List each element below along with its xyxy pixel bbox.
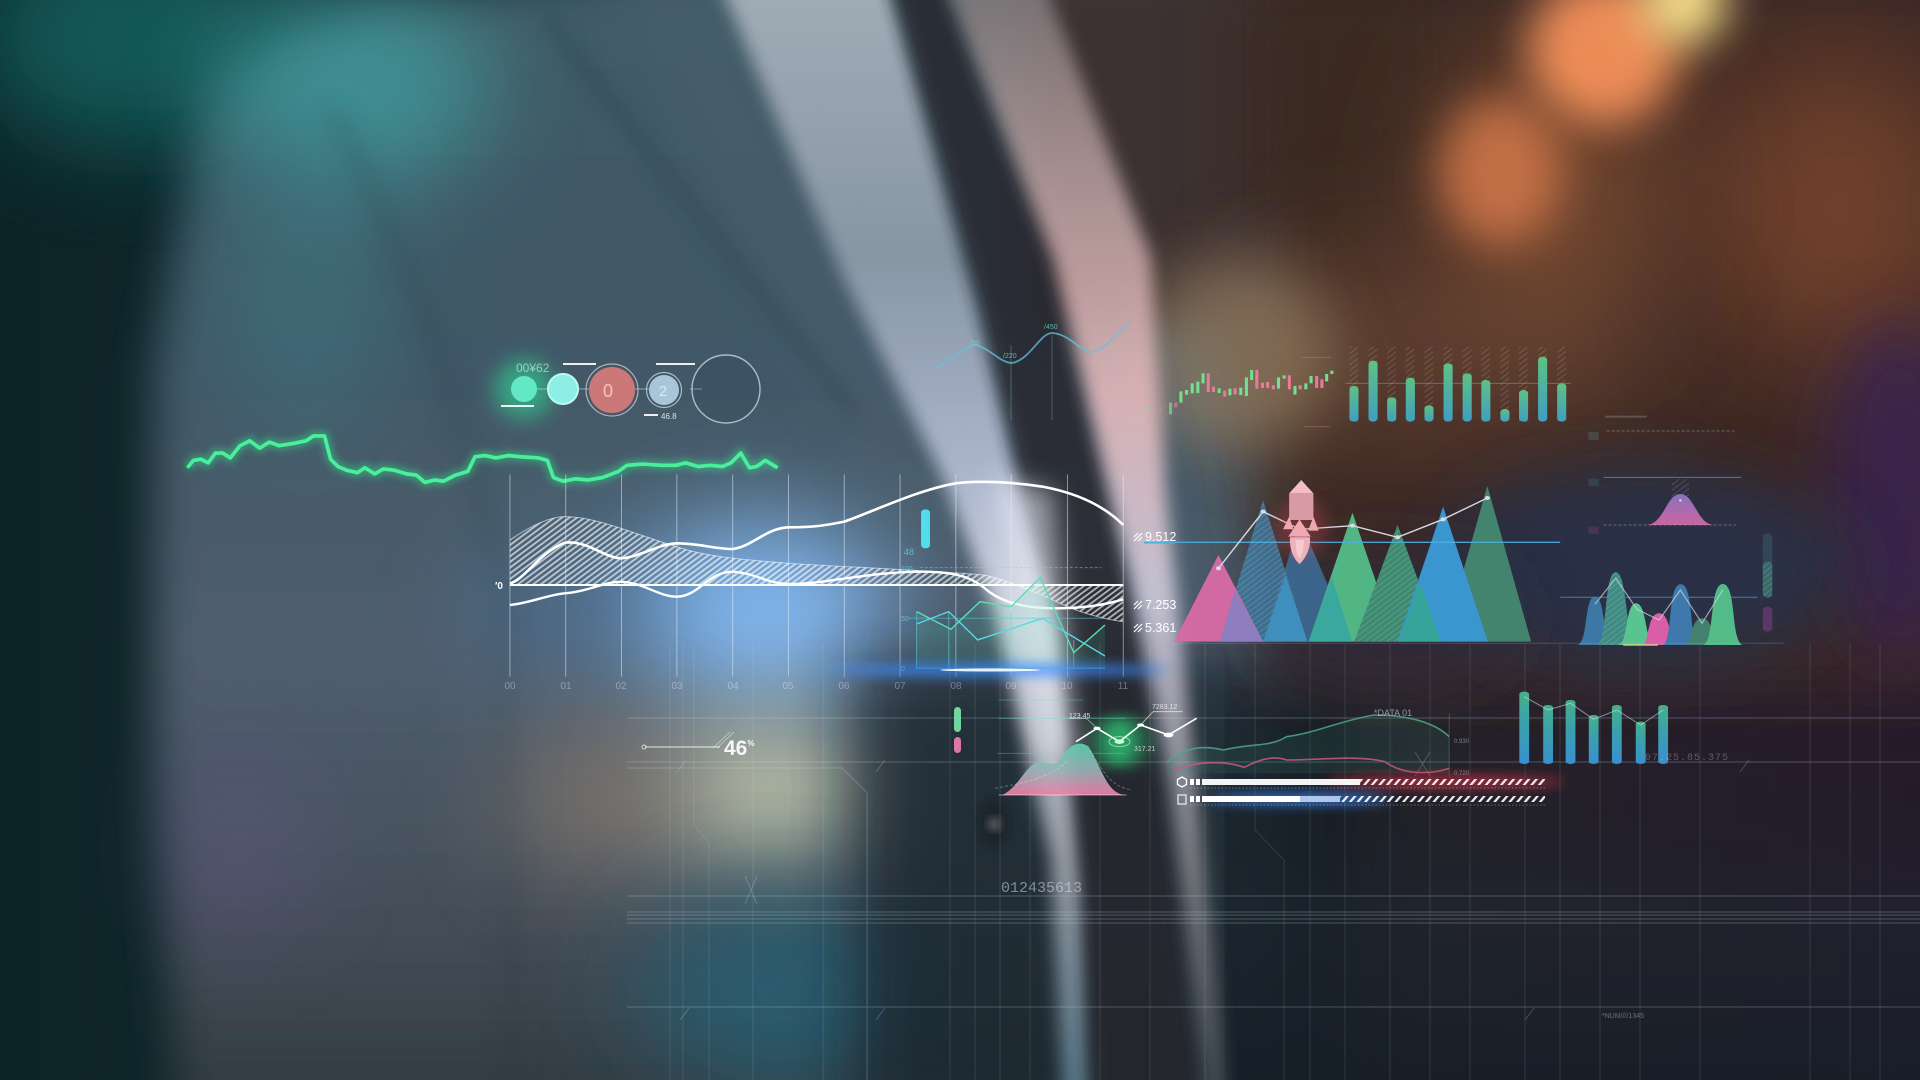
small data labels: 123.45 <box>1069 713 1091 720</box>
axis and value labels: 09 <box>1005 681 1017 692</box>
small data labels: 012435613 <box>1001 880 1082 897</box>
axis and value labels: 10 <box>1061 681 1073 692</box>
axis and value labels: 11 <box>1118 681 1129 692</box>
axis and value labels: 04 <box>727 681 739 692</box>
small data labels: 0.930 <box>1454 739 1470 745</box>
node indicators: 00¥62 <box>516 361 550 375</box>
axis and value labels: 06 <box>838 681 850 692</box>
small mountain chart with node line <box>995 700 1197 795</box>
axis and value labels: 9.512 <box>1145 530 1176 544</box>
node indicators: 46.8 <box>661 412 677 421</box>
candlestick chart <box>1146 357 1333 427</box>
small data labels <box>1001 704 1729 1020</box>
axis and value labels <box>495 530 1176 692</box>
axis and value labels: 7.253 <box>1145 598 1176 612</box>
small chart labels: 100 <box>901 566 913 573</box>
lower grid and circuit lines <box>627 644 1920 1080</box>
bell chart upper right <box>1588 417 1741 534</box>
axis and value labels: 05 <box>782 681 794 692</box>
faint cyan line chart: /450 <box>1044 324 1058 331</box>
node indicators <box>494 355 760 423</box>
horizontal blue lens flare <box>830 664 1170 676</box>
small data labels: 7283.12 <box>1152 704 1177 711</box>
triangle area chart <box>1144 486 1560 642</box>
small teal line chart <box>909 509 1105 668</box>
percentage readout: 46 <box>724 737 747 760</box>
axis and value labels: 03 <box>671 681 683 692</box>
faint cyan line chart: /220 <box>1003 353 1017 360</box>
small chart labels: 0 <box>901 666 905 673</box>
green line chart <box>187 436 778 482</box>
axis and value labels: ′0 <box>495 581 503 592</box>
small data labels: 07.25.85.375 <box>1645 753 1729 764</box>
axis and value labels: 02 <box>615 681 627 692</box>
axis and value labels: 00 <box>504 681 516 692</box>
small data labels: *DATA 01 <box>1374 708 1412 718</box>
right cylinder bar chart <box>1519 692 1668 764</box>
faint cyan line chart: /90 <box>970 340 980 347</box>
main line and hatched area chart <box>510 474 1123 677</box>
axis and value labels: 08 <box>950 681 962 692</box>
small data labels: 0.720 <box>1454 771 1470 777</box>
icon: rocket <box>1275 480 1327 564</box>
small data labels: *NUM////1345 <box>1602 1013 1644 1020</box>
axis and value labels: 01 <box>560 681 572 692</box>
axis and value labels: 07 <box>894 681 906 692</box>
progress bars <box>1178 777 1565 805</box>
small chart labels: 50 <box>901 616 909 623</box>
node indicators: 0 <box>603 381 613 401</box>
bar chart top right <box>1346 347 1571 422</box>
bell cluster chart lower right <box>1172 533 1784 645</box>
small chart labels: 48 <box>904 547 914 557</box>
vertical mini pills <box>954 707 961 753</box>
mountain line chart right <box>1167 713 1449 777</box>
percentage readout: % <box>747 739 754 748</box>
small data labels: 317.21 <box>1134 746 1156 753</box>
node indicators: 2 <box>659 383 667 400</box>
axis and value labels: 5.361 <box>1145 621 1176 635</box>
faint cyan line chart <box>935 322 1130 420</box>
percentage readout <box>642 732 754 760</box>
small chart labels <box>901 547 914 673</box>
